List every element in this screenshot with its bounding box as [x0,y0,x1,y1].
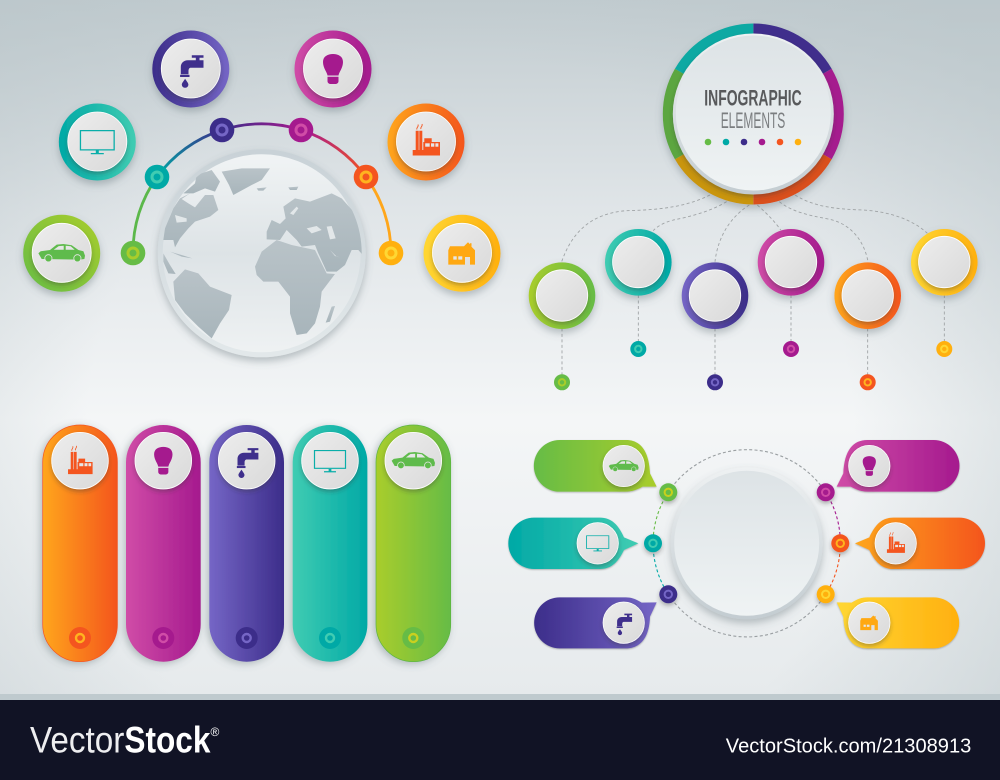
panel: hierarchy diagram [529,29,978,390]
bubble: house [837,597,959,648]
arc nodes [121,118,403,265]
logo: Vector [30,720,124,761]
dotted orbit [653,450,840,637]
badge: water tap [152,30,229,108]
image id: VectorStock.com/21308913 [726,736,971,758]
subheading: ELEMENTS [721,108,785,133]
logo bold: Stock [124,720,211,761]
main circle [668,29,838,199]
panel: vertical pill cards [43,425,451,662]
globe [160,152,366,355]
bubble: bulb [837,440,959,492]
item: green [529,262,595,390]
centre circle [671,467,823,619]
badge: light bulb [294,30,372,108]
item: orange [834,262,901,390]
dashed connectors [562,195,944,375]
orbit nodes [644,483,849,603]
badge: car [23,215,100,292]
colour dots [705,139,801,145]
pill: factory [43,425,117,662]
item: magenta [758,229,824,357]
item: yellow [911,229,978,357]
pill: tap [209,425,284,662]
pill: car [376,425,451,662]
bubble: factory [855,518,985,569]
pill: bulb [126,425,201,662]
item: teal [605,229,672,357]
footer band [0,700,1000,780]
heading: INFOGRAPHIC [704,85,802,110]
connecting arc [133,124,391,253]
badge: monitor [59,104,136,180]
pill: monitor [293,425,367,662]
badge: factory [388,104,464,180]
bubble: car [534,440,657,492]
item: purple [682,262,748,390]
badge: house [424,215,500,292]
registered mark: ® [210,725,220,739]
bubble: monitor [508,518,638,569]
bubble: tap [534,597,657,648]
panel: globe arc diagram [23,30,500,355]
panel: speech bubble radial [508,440,985,648]
